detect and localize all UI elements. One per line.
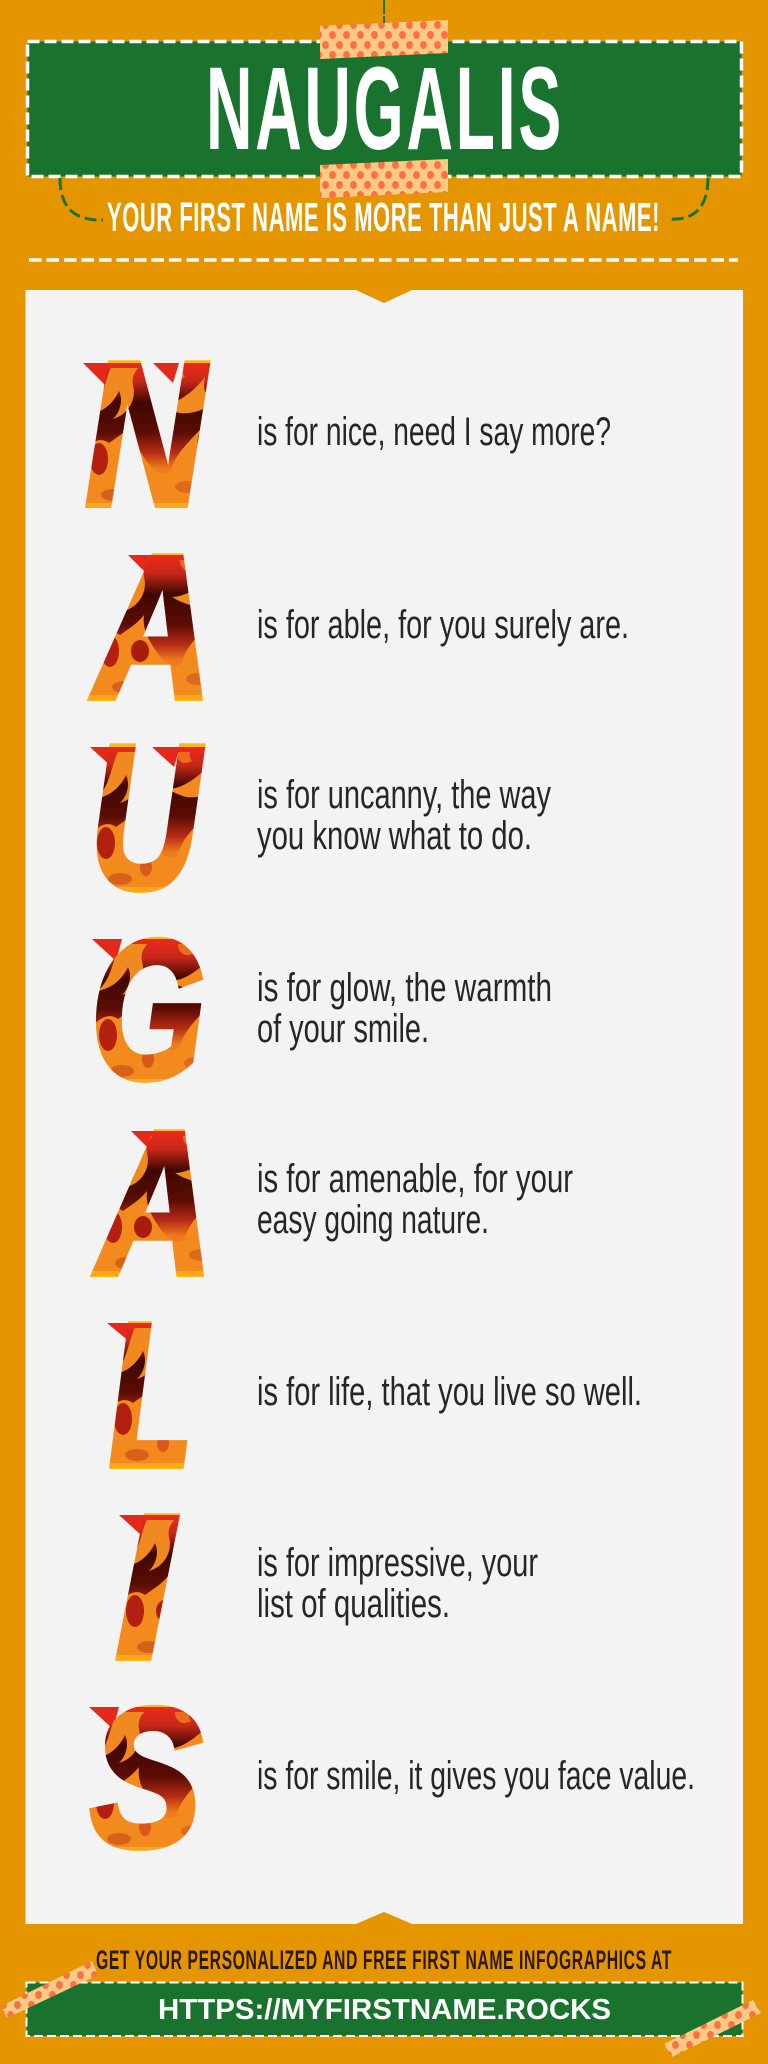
row S (89, 1667, 695, 1888)
text I (257, 1541, 538, 1626)
tape right (664, 2000, 761, 2057)
panel: acrostic (26, 290, 743, 1924)
letter S: S (90, 1667, 202, 1888)
connector left (60, 178, 103, 220)
letter L: L (109, 1280, 193, 1510)
letter G: G (91, 899, 205, 1120)
header: name banner (28, 0, 742, 198)
row A2 (93, 1088, 573, 1318)
row U (90, 702, 551, 932)
hanging string (383, 0, 385, 24)
tape bottom (320, 159, 448, 198)
letter U: U (90, 702, 203, 932)
tape left (2, 1961, 98, 2018)
letter A: A (90, 512, 212, 742)
green banner (26, 1982, 742, 2036)
green banner (28, 42, 742, 176)
text G: of your smile. (257, 1007, 429, 1051)
letter I: I (115, 1472, 177, 1702)
text G: is for glow, the warmth (257, 966, 552, 1010)
url: HTTPS://MYFIRSTNAME.ROCKS (158, 1994, 611, 2026)
tape top (320, 20, 448, 59)
letter A: A (93, 1088, 213, 1318)
text U (257, 773, 551, 858)
text I: is for impressive, your (257, 1541, 538, 1585)
text A2: is for amenable, for your (257, 1157, 573, 1201)
row A (90, 512, 629, 742)
text U: you know what to do. (257, 814, 532, 858)
text A: is for able, for you surely are. (257, 603, 629, 647)
text G (257, 966, 552, 1051)
text I: list of qualities. (257, 1582, 450, 1626)
row I (115, 1472, 538, 1702)
text A2: easy going nature. (257, 1198, 489, 1242)
text A2 (257, 1157, 573, 1242)
connector right (669, 178, 708, 219)
text U: is for uncanny, the way (257, 773, 551, 817)
divider (29, 258, 738, 262)
row G (91, 899, 552, 1120)
row L (107, 1280, 642, 1510)
letter N: N (85, 319, 208, 549)
text N: is for nice, need I say more? (257, 410, 611, 454)
footer: url banner (2, 1961, 761, 2057)
row N (83, 319, 611, 549)
letter L (107, 1280, 193, 1510)
